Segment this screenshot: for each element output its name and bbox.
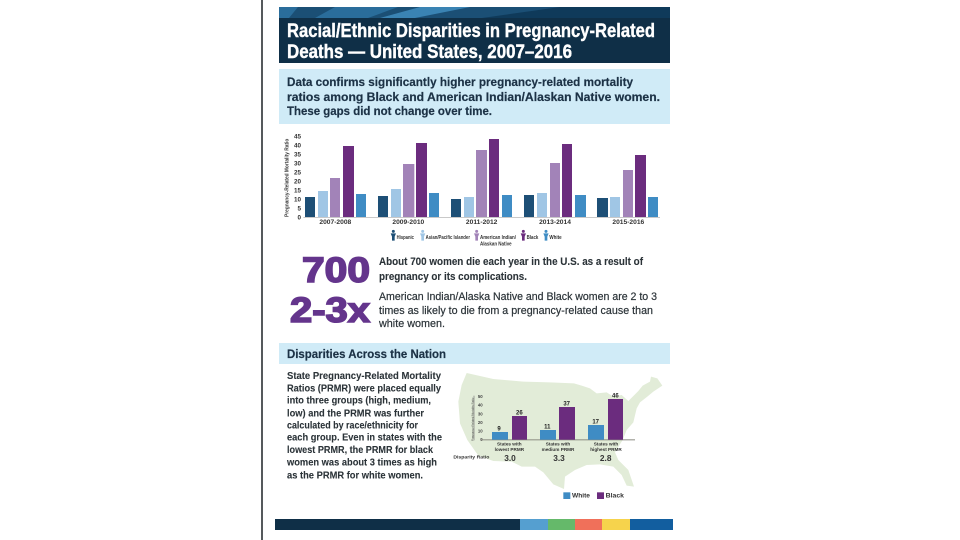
explanatory text block: lowest PRMR, the PRMR for black: [287, 444, 433, 456]
legend: White: [543, 230, 562, 241]
US map silhouette: [458, 373, 662, 489]
y axis ticks: 45: [294, 134, 301, 141]
explanatory text block: into three groups (high, medium,: [287, 395, 431, 407]
summary callout: These gaps did not change over time.: [287, 104, 492, 118]
bars 2013-2014: [524, 144, 586, 217]
map chart: PRMR by state group: [453, 373, 662, 500]
stat: 2-3x: times as likely to die from a pregnancy-related cause than: [379, 305, 653, 317]
map chart axis: 40: [478, 403, 483, 408]
y axis ticks: 15: [294, 188, 301, 195]
group labels: States with: [546, 442, 570, 447]
bars: highest PRMR: 17: [592, 420, 600, 426]
stat: 2-3x: white women.: [378, 318, 445, 330]
y axis ticks: 40: [294, 143, 301, 150]
summary callout: ratios among Black and American Indian/Alaskan Native women.: [287, 90, 660, 104]
disparity ratio row: 3.3: [553, 453, 565, 463]
stat: 700: pregnancy or its complications.: [379, 271, 527, 283]
bars 2015-2016: [597, 155, 658, 217]
legend: White: White: [549, 235, 562, 241]
map chart axis: 30: [478, 411, 483, 416]
map chart axis: 50: [478, 394, 483, 399]
explanatory text block: each group. Even in states with the: [287, 432, 442, 444]
legend: Black: Black: [527, 235, 538, 241]
disparity ratio row: 2.8: [600, 453, 612, 463]
bars: highest PRMR: 46: [612, 394, 619, 400]
bars: lowest PRMR: 9: [497, 427, 501, 433]
y axis ticks: [294, 134, 301, 222]
x axis period labels: [319, 219, 645, 226]
x axis period labels: 2007-2008: [319, 219, 352, 226]
group labels: [495, 442, 622, 452]
summary callout: [279, 69, 670, 124]
explanatory text block: calculated by race/ethnicity for: [287, 420, 418, 432]
legend: Asian/Pacific Islander: Asian/Pacific Islander: [426, 235, 470, 241]
group labels: medium PRMR: [542, 447, 575, 452]
y axis ticks: 10: [294, 197, 301, 204]
bar chart: mortality ratio by period and race: [285, 134, 660, 248]
map chart legend: White: [572, 493, 590, 500]
explanatory text block: low) and the PRMR was further: [287, 407, 424, 419]
legend: American Indian/Alaskan Native: Alaskan Native: [480, 242, 512, 248]
stat: 700: 700: [302, 251, 370, 290]
bars: medium PRMR: 11: [544, 425, 551, 431]
y axis ticks: 20: [294, 179, 301, 186]
bars: lowest PRMR: 26: [516, 410, 523, 416]
stat: 2-3x: [290, 291, 657, 330]
disparity ratio row: 3.0: [504, 453, 516, 463]
explanatory text block: women was about 3 times as high: [286, 457, 437, 469]
y axis ticks: 30: [294, 161, 301, 168]
y axis ticks: 5: [297, 206, 301, 213]
stat: 2-3x: American Indian/Alaska Native and Black women are 2 to 3: [379, 291, 657, 303]
group labels: States with: [594, 442, 618, 447]
group labels: highest PRMR: [590, 447, 622, 452]
x axis period labels: 2011-2012: [466, 219, 498, 226]
explanatory text block: Ratios (PRMR) were placed equally: [287, 383, 441, 395]
map chart axis: Pregnancy-Related Mortality Ratio: [471, 397, 474, 441]
y axis title: Pregnancy-Related Mortality Ratio: [285, 138, 291, 217]
bars 2009-2010: [378, 143, 439, 217]
x axis period labels: 2015-2016: [612, 219, 645, 226]
explanatory text block: [286, 370, 442, 481]
legend: Hispanic: [391, 230, 414, 241]
title banner: Deaths — United States, 2007–2016: [287, 42, 572, 63]
explanatory text block: as the PRMR for white women.: [287, 469, 423, 481]
disparity ratio row: [453, 453, 612, 463]
chart legend: [391, 230, 562, 248]
stat: 700: [302, 251, 643, 290]
bars: medium PRMR: 37: [563, 402, 571, 408]
bars 2007-2008: [305, 146, 366, 217]
bars: medium PRMR: [540, 402, 575, 440]
legend: American Indian/Alaskan Native: American Indian/: [480, 235, 516, 241]
stat: 2-3x: 2-3x: [290, 291, 371, 330]
legend: American Indian/Alaskan Native: [474, 230, 516, 248]
map chart axis: [471, 394, 483, 442]
summary callout: Data confirms significantly higher pregnancy-related mortality: [287, 75, 633, 89]
bars: lowest PRMR: [492, 410, 527, 440]
bars: highest PRMR: [588, 394, 623, 440]
map chart axis: 0: [480, 437, 483, 442]
group labels: States with: [497, 442, 522, 447]
y axis ticks: 0: [297, 215, 301, 222]
section heading: Disparities Across the Nation: [279, 343, 670, 364]
disparity ratio row: Disparity Ratio: [453, 455, 489, 460]
x axis period labels: 2013-2014: [539, 219, 571, 226]
explanatory text block: State Pregnancy-Related Mortality: [287, 370, 441, 382]
map chart legend: Black: [606, 493, 624, 500]
map chart axis: 20: [478, 420, 483, 425]
y axis ticks: 25: [294, 170, 301, 177]
x axis period labels: 2009-2010: [392, 219, 425, 226]
legend: Asian/Pacific Islander: [420, 230, 470, 241]
title banner: [279, 7, 670, 63]
bars 2011-2012: [451, 139, 512, 217]
map chart legend: [563, 492, 624, 500]
map chart axis: 10: [478, 429, 483, 434]
y axis ticks: 35: [294, 152, 301, 159]
footer colour bar: [275, 519, 673, 530]
title banner: Racial/Ethnic Disparities in Pregnancy-Related: [287, 21, 655, 42]
legend: Hispanic: Hispanic: [397, 235, 414, 241]
group labels: lowest PRMR: [495, 447, 525, 452]
section heading: Disparities Across the Nation: Disparities Across the Nation: [287, 347, 446, 361]
legend: Black: [521, 230, 538, 241]
stat: 700: About 700 women die each year in the U.S. as a result of: [379, 256, 643, 268]
